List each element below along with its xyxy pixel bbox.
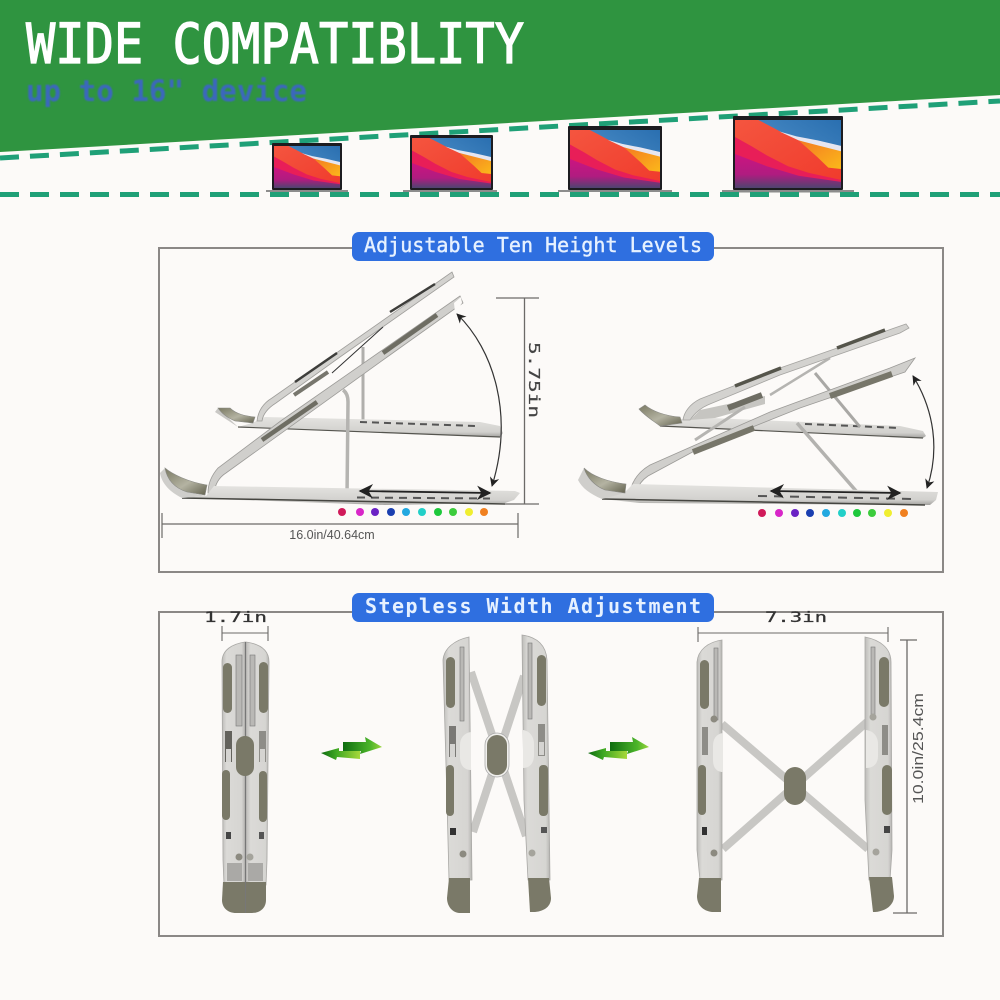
title: WIDE COMPATIBLITY (26, 12, 524, 76)
front arm (630, 358, 915, 492)
scissor arms (471, 672, 526, 836)
rear base (660, 417, 926, 438)
dimension: width 7.3in (698, 610, 888, 642)
front prop (343, 390, 348, 497)
left rail (697, 640, 722, 880)
slots (714, 648, 718, 720)
pads (223, 663, 232, 713)
green header band (0, 0, 1000, 152)
laptop: large (558, 126, 672, 192)
center pad (236, 736, 254, 776)
scissor arms (722, 722, 868, 849)
dimension: height 5.75in: 5.75in (525, 342, 543, 418)
panel frame (159, 248, 943, 572)
rear arm (257, 272, 454, 421)
level dots: right stand (758, 509, 908, 517)
angle arrow: right stand (913, 376, 934, 488)
subtitle: up to 16" device (26, 74, 307, 108)
marks (702, 827, 707, 835)
cutouts (713, 733, 723, 772)
motion arrows: second (588, 737, 649, 760)
dimension: width 7.3in: 7.3in (765, 610, 827, 626)
slide arrow (360, 491, 490, 493)
pads (446, 657, 455, 708)
panel: height levels (159, 232, 943, 572)
feet (447, 878, 470, 913)
laptop: small (266, 143, 348, 192)
center pad (485, 733, 509, 777)
latches (449, 726, 456, 757)
right rail (865, 637, 892, 880)
laptops row (266, 116, 854, 192)
rear arm (683, 324, 909, 420)
angle arrow: left stand (457, 314, 501, 486)
center pad (784, 767, 806, 805)
heading pill: Stepless Width Adjustment (365, 594, 701, 618)
dimension: depth 10.0in: 10.0in/25.4cm (910, 693, 927, 804)
dimension: width 1.7in (204, 610, 268, 641)
laptop: extra large (722, 116, 854, 192)
front base (602, 484, 938, 505)
panel frame (159, 612, 943, 936)
stand: folded top view (222, 642, 269, 913)
slide arrow (771, 491, 900, 493)
dimension: length 16.0in: 16.0in/40.64cm (289, 528, 375, 542)
dimension: length 16.0in (162, 513, 518, 542)
sloped dashed line (0, 101, 1000, 158)
stand: half open top view (443, 635, 551, 913)
motion arrows: first (321, 737, 382, 760)
front base (182, 486, 520, 505)
front prop (797, 423, 857, 492)
rear foot (639, 405, 682, 426)
stand: high position side view (160, 272, 520, 505)
front foot (160, 468, 207, 498)
baseline dashed line (0, 192, 1000, 197)
struts (815, 373, 860, 427)
stand: low position side view (578, 324, 938, 505)
rear foot (215, 408, 255, 427)
stand: fully open top view (697, 637, 894, 912)
laptop: medium (403, 135, 497, 192)
front foot (578, 468, 626, 499)
dimension: depth 10.0in (893, 640, 927, 913)
feet (697, 878, 721, 912)
heading pill: Adjustable Ten Height Levels (364, 233, 702, 257)
panel: width adjustment (159, 593, 943, 936)
front arm (208, 296, 463, 493)
latches (225, 731, 232, 762)
latches (702, 727, 708, 755)
rear base (238, 417, 503, 437)
left rail (222, 642, 245, 885)
feet (222, 882, 245, 913)
dimension: width 1.7in: 1.7in (204, 610, 267, 626)
right rail (246, 642, 269, 885)
slots (236, 655, 242, 726)
level dots: left stand (338, 508, 488, 516)
dimension: height 5.75in (496, 298, 543, 504)
left rail (443, 637, 472, 880)
marks (226, 832, 231, 839)
marks (450, 828, 456, 835)
cutouts (460, 732, 471, 770)
right rail (522, 635, 550, 880)
rear prop (362, 347, 364, 420)
pads (700, 660, 709, 709)
slots (460, 647, 464, 721)
